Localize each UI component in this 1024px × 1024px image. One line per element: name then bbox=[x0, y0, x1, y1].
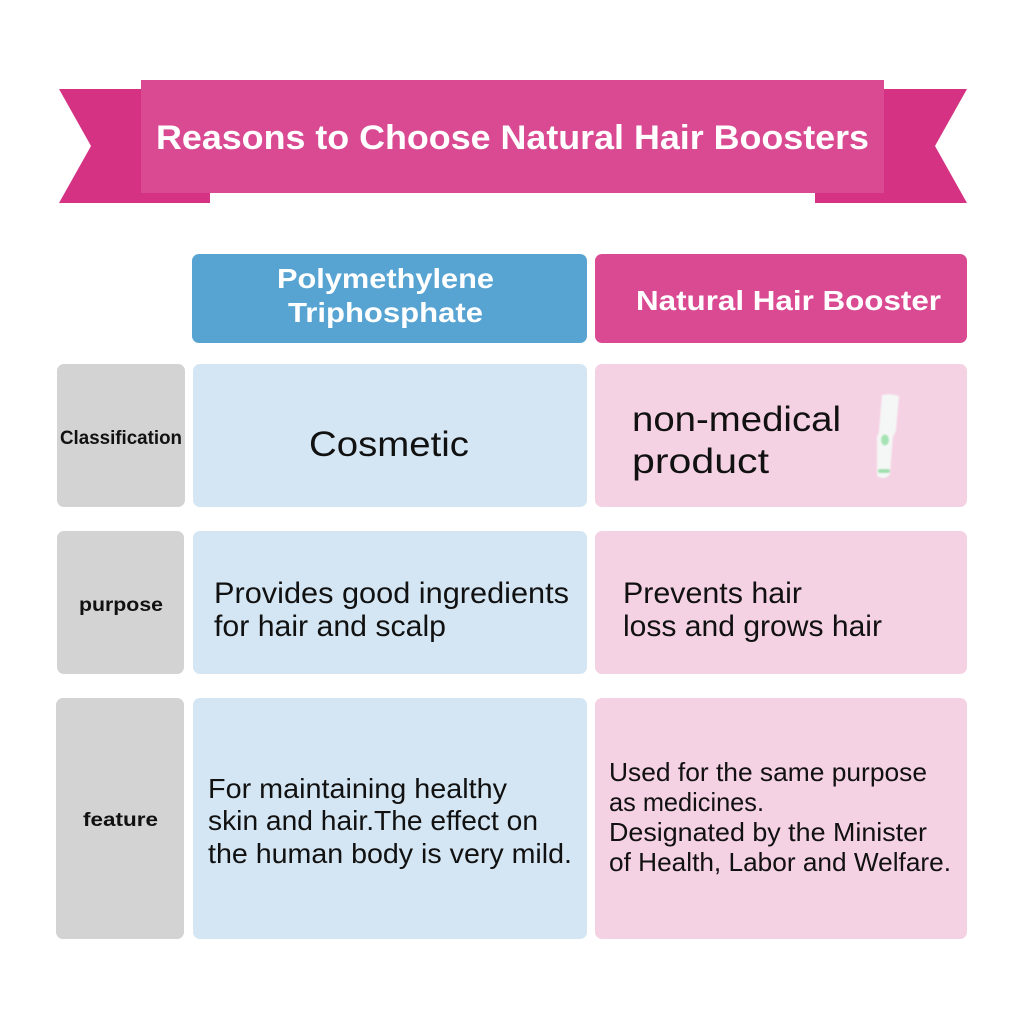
banner right tail bbox=[815, 89, 967, 203]
row label: purpose: purpose bbox=[79, 595, 163, 616]
cell: feature, Natural Hair Booster: of Health, Labor and Welfare. bbox=[609, 847, 951, 877]
cell: non-medical product: product bbox=[632, 442, 769, 481]
title banner bbox=[59, 80, 967, 203]
cell: Cosmetic bbox=[193, 364, 587, 507]
row label: Classification bbox=[57, 364, 185, 507]
column header: Polymethylene Triphosphate: Polymethylene bbox=[277, 263, 494, 294]
cell: purpose, Natural Hair Booster bbox=[595, 531, 967, 674]
column header: Natural Hair Booster: Natural Hair Booster bbox=[636, 285, 941, 316]
cell: feature, Natural Hair Booster: as medicines. bbox=[609, 787, 764, 817]
row label: purpose bbox=[57, 531, 184, 674]
column header: Polymethylene Triphosphate: Triphosphate bbox=[288, 297, 483, 328]
cell: non-medical product: non-medical bbox=[632, 400, 841, 439]
cell: feature, Polymethylene Triphosphate bbox=[193, 698, 587, 939]
cell: feature, Polymethylene Triphosphate: skin and hair.The effect on bbox=[208, 805, 538, 836]
cell: feature, Polymethylene Triphosphate: For maintaining healthy bbox=[208, 773, 507, 804]
cell: purpose, Polymethylene Triphosphate: Provides good ingredients bbox=[214, 577, 569, 610]
cell: non-medical product bbox=[595, 364, 967, 507]
cell: feature, Natural Hair Booster: Designated by the Minister bbox=[609, 817, 927, 847]
banner left tail bbox=[59, 89, 210, 203]
cell: feature, Natural Hair Booster: Used for the same purpose bbox=[609, 757, 927, 787]
cell: feature, Polymethylene Triphosphate: the human body is very mild. bbox=[208, 838, 572, 869]
column header: Polymethylene Triphosphate bbox=[192, 254, 587, 343]
title: Reasons to Choose Natural Hair Boosters bbox=[156, 119, 869, 157]
column header: Natural Hair Booster bbox=[595, 254, 967, 343]
cell: Cosmetic: Cosmetic bbox=[309, 425, 469, 464]
cell: purpose, Natural Hair Booster: Prevents hair bbox=[623, 577, 802, 610]
row label: Classification: Classification bbox=[60, 428, 182, 449]
cell: feature, Natural Hair Booster bbox=[595, 698, 967, 939]
row label: feature: feature bbox=[83, 810, 158, 831]
cell: purpose, Polymethylene Triphosphate: for hair and scalp bbox=[214, 610, 446, 643]
row label: feature bbox=[56, 698, 184, 939]
cell: purpose, Polymethylene Triphosphate bbox=[193, 531, 587, 674]
icon: product bottle bbox=[877, 394, 899, 478]
banner main band bbox=[141, 80, 884, 193]
cell: purpose, Natural Hair Booster: loss and grows hair bbox=[623, 610, 882, 643]
